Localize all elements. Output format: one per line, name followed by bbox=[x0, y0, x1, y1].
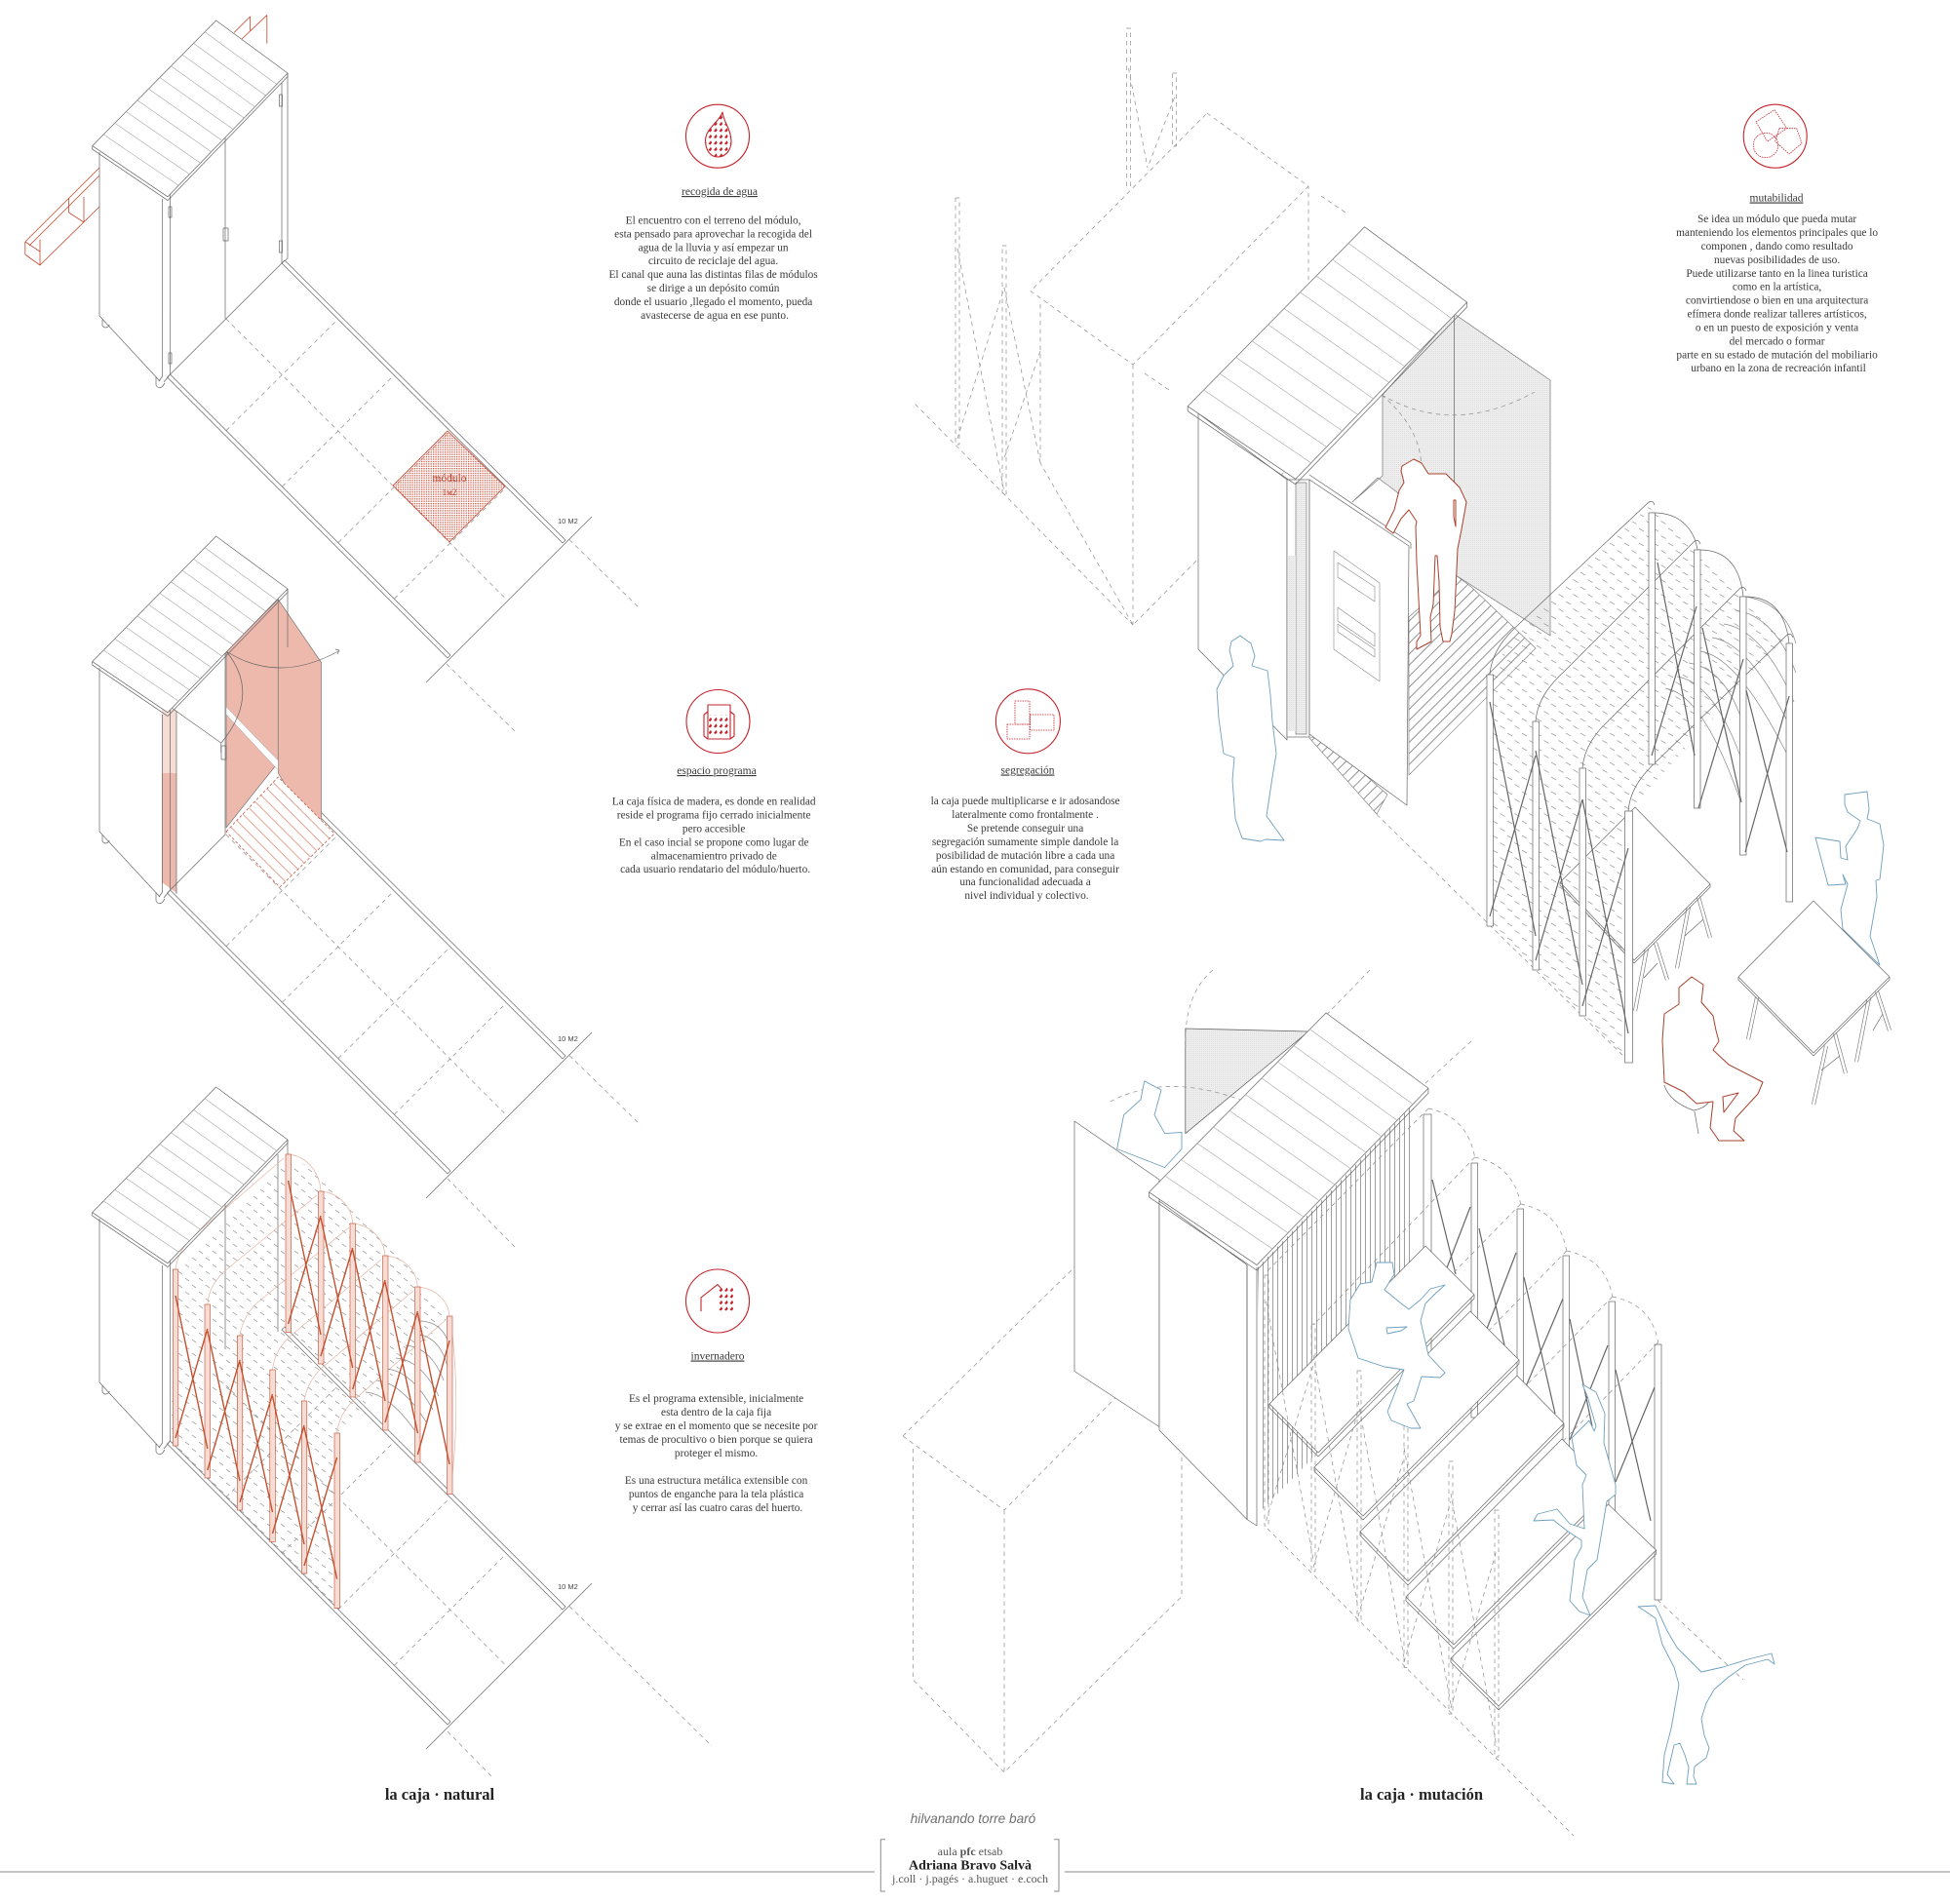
timber box bbox=[99, 73, 288, 388]
plot area label: 10 M2 bbox=[558, 517, 578, 525]
ground plot with dashed grid bbox=[168, 776, 641, 1198]
box side wall bbox=[1159, 1201, 1247, 1519]
text block: mutabilidad: como en la artística, bbox=[1733, 281, 1821, 292]
dashed door swing arcs bbox=[1382, 392, 1535, 491]
text block: segregación: segregación sumamente simple dandole la bbox=[932, 836, 1118, 848]
dashed folded scissor posts bbox=[956, 28, 1177, 494]
box body bbox=[1198, 413, 1287, 740]
text block: recogida de agua: El encuentro con el terreno del módulo, bbox=[626, 214, 801, 226]
dashed ground axes bbox=[1268, 1529, 1743, 1836]
red module square: módulo bbox=[432, 473, 467, 485]
timber box behind greenhouse bbox=[99, 1140, 288, 1455]
text block: mutabilidad: manteniendo los elementos principales que lo bbox=[1676, 227, 1878, 239]
greenhouse fabric bbox=[1490, 504, 1789, 1063]
panel: la caja mutación, upper drawing bbox=[916, 28, 1890, 1141]
back row posts bbox=[1649, 513, 1792, 902]
table 2 bbox=[1738, 901, 1890, 1105]
panel: la caja mutación, lower drawing bbox=[903, 970, 1774, 1836]
heading: espacio programa: espacio programa bbox=[677, 765, 757, 777]
text block: mutabilidad: convirtiendose o bien en una arquitectura bbox=[1686, 294, 1868, 306]
text block: segregación: posibilidad de mutación libre a cada una bbox=[936, 850, 1114, 862]
left row posts bbox=[173, 1269, 339, 1609]
text block: invernadero: puntos de enganche para la tela plástica bbox=[629, 1489, 803, 1500]
open door panel with poster bbox=[1309, 475, 1411, 805]
text block: espacio programa: pero accesible bbox=[682, 823, 745, 835]
front strip bbox=[1287, 480, 1309, 737]
greenhouse rib arcs bbox=[1665, 597, 1796, 809]
ground extension dash bbox=[447, 664, 516, 732]
front row scissor braces bbox=[1490, 702, 1628, 1033]
text block: segregación: lateralmente como frontalmente . bbox=[952, 809, 1099, 821]
text block: recogida de agua: circuito de reciclaje del agua. bbox=[648, 255, 778, 267]
dashed ghost box bbox=[903, 970, 1471, 1772]
roof planks bbox=[93, 20, 288, 201]
dashed lateral arcs bbox=[1267, 1108, 1658, 1510]
roof planks bbox=[93, 536, 288, 717]
text block: invernadero: proteger el mismo. bbox=[675, 1448, 758, 1459]
heading: mutabilidad: mutabilidad bbox=[1750, 193, 1804, 205]
corrugated face bbox=[1247, 1105, 1413, 1526]
subtitle: hilvanando torre baró: hilvanando torre baró bbox=[911, 1811, 1036, 1826]
text block: recogida de agua: agua de la lluvia y así empezar un bbox=[639, 242, 789, 253]
roof planks bbox=[93, 1087, 288, 1267]
grey rotated panel bbox=[1186, 1029, 1308, 1134]
table 1 bbox=[1560, 807, 1710, 1011]
greenhouse fabric bbox=[171, 1154, 449, 1609]
red person leaning bbox=[1385, 459, 1466, 649]
text block: espacio programa: La caja física de madera, es donde en realidad bbox=[612, 796, 816, 807]
interior corner line bbox=[1454, 314, 1456, 563]
ground extension dash bbox=[448, 1179, 516, 1248]
panel: la caja natural, module 1 bbox=[25, 16, 641, 732]
text block: invernadero: y cerrar así las cuatro caras del huerto. bbox=[633, 1502, 802, 1514]
greenhouse arches bbox=[176, 1154, 456, 1494]
blue person handstand bbox=[1638, 1606, 1774, 1784]
text block: segregación: una funcionalidad adecuada a bbox=[959, 876, 1091, 888]
text block: mutabilidad: Se idea un módulo que pueda mutar bbox=[1697, 214, 1856, 225]
credits block with brackets bbox=[880, 1840, 1059, 1891]
credits block with brackets: aula pfc etsab bbox=[938, 1845, 1002, 1858]
plot area label: 10 M2 bbox=[558, 1582, 578, 1591]
red person seated with stool bbox=[1662, 977, 1763, 1141]
ground plot with dashed grid bbox=[168, 1327, 641, 1749]
text block: espacio programa: reside el programa fijo cerrado inicialmente bbox=[617, 809, 811, 821]
text block: segregación: Se pretende conseguir una bbox=[967, 823, 1083, 835]
heading: segregación: segregación bbox=[1001, 764, 1055, 776]
red module square: 1м2 bbox=[443, 487, 456, 497]
icon: water drop bbox=[686, 104, 749, 168]
pink open interior bbox=[162, 600, 334, 893]
greenhouse arches bbox=[1490, 501, 1793, 811]
footer rule left bbox=[0, 1871, 875, 1873]
rib arcs in last bays bbox=[366, 1321, 450, 1437]
dashed ghost box bbox=[916, 113, 1630, 1063]
text block: espacio programa: En el caso incial se propone como lugar de bbox=[619, 836, 809, 848]
roof planks bbox=[1150, 1013, 1428, 1270]
door swing arcs bbox=[221, 649, 339, 743]
heading: recogida de agua: recogida de agua bbox=[682, 186, 758, 198]
text block: invernadero: Es el programa extensible, inicialmente bbox=[629, 1393, 803, 1405]
text block: segregación: la caja puede multiplicarse e ir adosandose bbox=[931, 796, 1120, 807]
back row scissor braces bbox=[1652, 563, 1789, 852]
text block: mutabilidad: componen , dando como resultado bbox=[1701, 241, 1853, 253]
blue person dancing bbox=[1534, 1384, 1616, 1615]
panel: la caja natural, module 3 bbox=[93, 1087, 712, 1778]
text block: mutabilidad: del mercado o formar bbox=[1730, 335, 1825, 347]
grey back panel bbox=[1352, 314, 1550, 636]
hatched floor bbox=[1309, 575, 1536, 814]
heading: invernadero: invernadero bbox=[691, 1351, 745, 1363]
text block: segregación: nivel individual y colectivo. bbox=[964, 890, 1089, 902]
title: la caja natural: la caja · natural bbox=[385, 1785, 495, 1804]
timber box, open bbox=[99, 589, 288, 904]
text block: recogida de agua: El canal que auna las distintas filas de módulos bbox=[608, 269, 818, 281]
text block: invernadero: Es una estructura metálica extensible con bbox=[625, 1475, 808, 1487]
text block: mutabilidad: parte en su estado de mutación del mobiliario bbox=[1676, 349, 1878, 361]
text block: invernadero: temas de procultivo o bien porque se quiera bbox=[620, 1434, 813, 1446]
text block: recogida de agua: donde el usuario ,llegado el momento, pueda bbox=[614, 296, 812, 308]
ground extension dashes bbox=[448, 1676, 712, 1778]
dashed swing arcs bbox=[1111, 970, 1240, 1102]
right row scissor braces bbox=[289, 1181, 449, 1464]
credits block with brackets: Adriana Bravo Salvà bbox=[909, 1858, 1032, 1874]
plot area label: 10 M2 bbox=[558, 1034, 578, 1043]
text block: espacio programa: cada usuario rendatario del módulo/huerto. bbox=[620, 864, 810, 875]
icon: program space bbox=[686, 690, 750, 753]
swung side panel bbox=[1074, 1121, 1159, 1427]
blue person standing bbox=[1217, 636, 1284, 841]
front row posts bbox=[1487, 675, 1632, 1063]
text block: mutabilidad: Puede utilizarse tanto en la linea turistica bbox=[1686, 268, 1868, 280]
text block: mutabilidad: nuevas posibilidades de uso. bbox=[1714, 254, 1840, 266]
title: la caja mutación: la caja · mutación bbox=[1360, 1785, 1483, 1804]
text block: mutabilidad: efímera donde realizar talleres artísticos, bbox=[1687, 308, 1867, 320]
credits block with brackets: j.coll · j.pagés · a.huguet · e.coch bbox=[891, 1872, 1048, 1885]
icon: segregation bbox=[995, 689, 1060, 754]
panel: la caja natural, module 2 bbox=[93, 536, 641, 1248]
red water gutter bbox=[25, 16, 267, 265]
footer rule right bbox=[1065, 1871, 1950, 1873]
text block: invernadero: esta dentro de la caja fija bbox=[661, 1407, 771, 1418]
text block: espacio programa: almacenamientro privado de bbox=[651, 850, 777, 862]
text block: invernadero: y se extrae en el momento que se necesite por bbox=[615, 1420, 818, 1432]
text block: segregación: aún estando en comunidad, para conseguir bbox=[931, 864, 1119, 875]
icon: mutability bbox=[1743, 104, 1807, 168]
dashed front row scissor posts bbox=[1265, 1275, 1499, 1757]
text block: mutabilidad: o en un puesto de exposición y venta bbox=[1696, 322, 1858, 333]
ground plot with dashed grid bbox=[168, 260, 641, 682]
roof planks bbox=[1188, 227, 1467, 485]
platform steps bbox=[1269, 1246, 1657, 1710]
blue person seated on platform bbox=[1348, 1263, 1445, 1428]
text block: recogida de agua: avastecerse de agua en ese punto. bbox=[641, 310, 789, 322]
text block: recogida de agua: esta pensado para aprovechar la recogida del bbox=[614, 228, 812, 240]
left row scissor braces bbox=[176, 1296, 337, 1579]
right row posts bbox=[286, 1154, 452, 1494]
blue person reading bbox=[1815, 792, 1884, 965]
text block: mutabilidad: urbano en la zona de recreación infantil bbox=[1691, 363, 1866, 374]
red module square bbox=[393, 431, 505, 542]
back row posts and braces bbox=[1424, 1114, 1661, 1600]
blue person behind panel bbox=[1117, 1081, 1182, 1168]
icon: greenhouse bbox=[686, 1269, 749, 1333]
text block: recogida de agua: se dirige a un depósito común bbox=[647, 283, 780, 294]
